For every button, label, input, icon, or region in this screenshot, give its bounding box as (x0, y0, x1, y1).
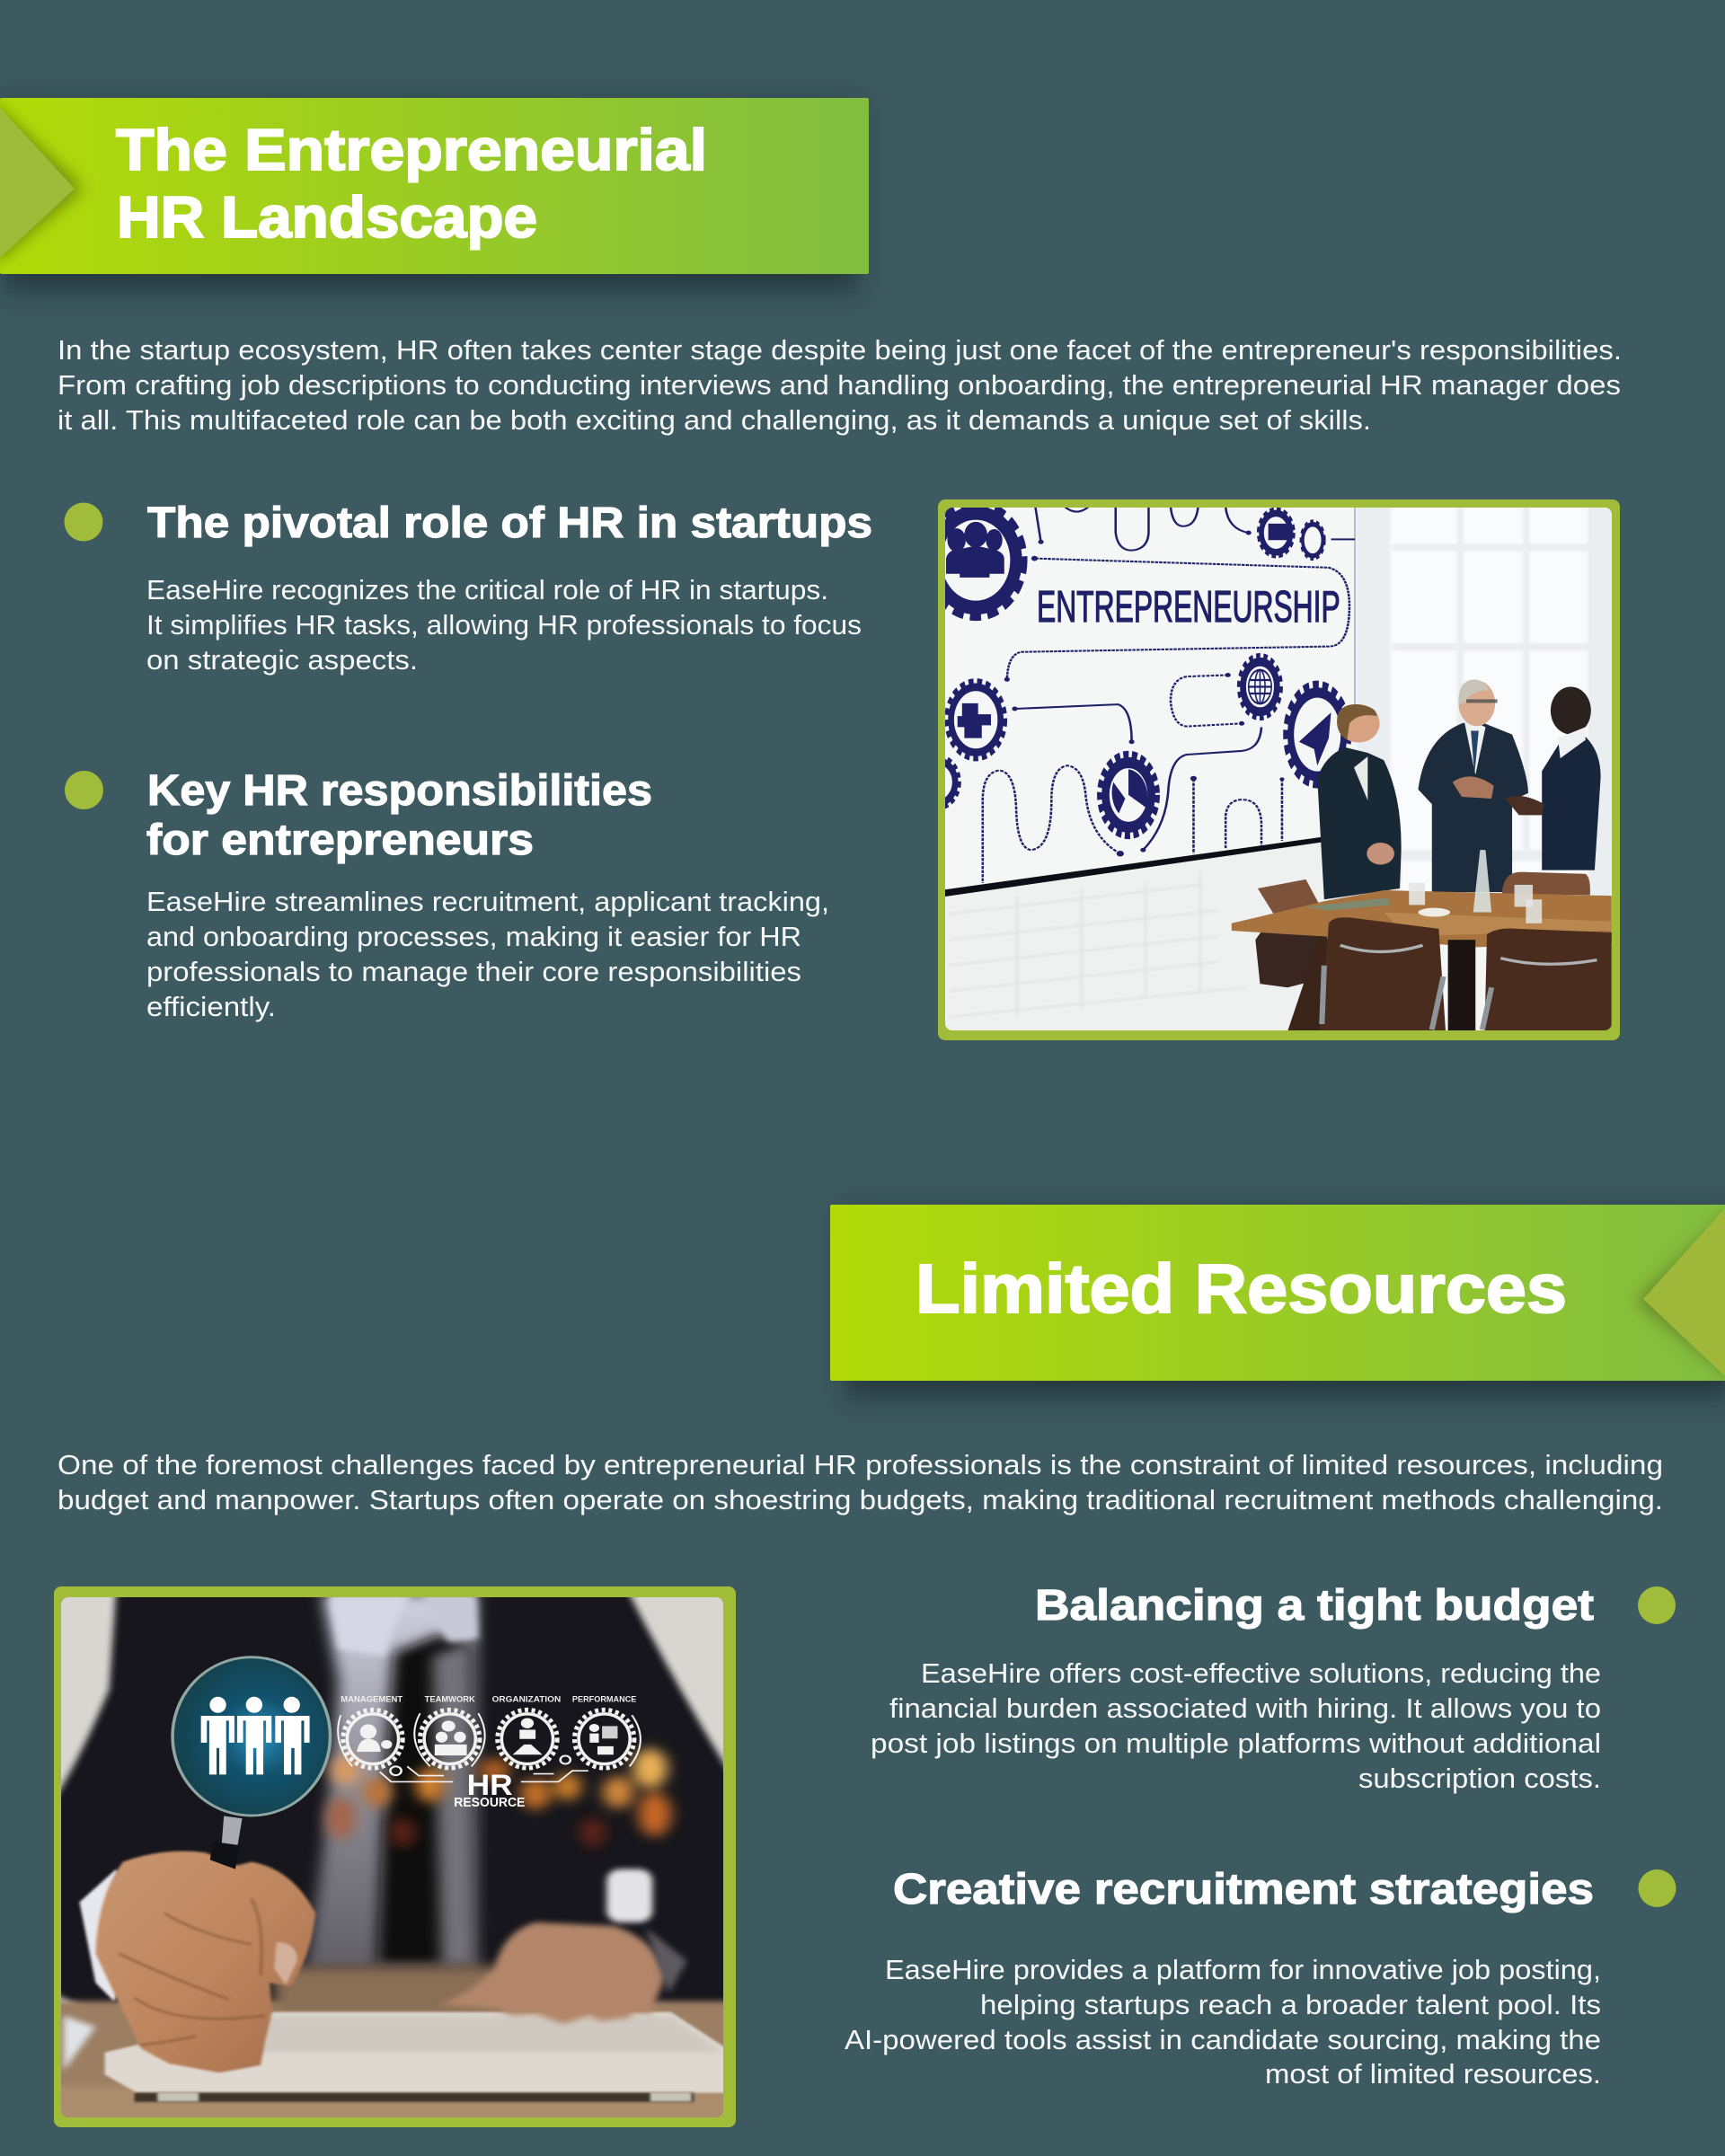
text block: intro one: it all. This multifaceted role can be both exciting and challenging, as it demands a unique set of skills. (58, 404, 1371, 436)
panel: balancing a tight budget (871, 1582, 1676, 1794)
text block: intro one: In the startup ecosystem, HR often takes center stage despite being just one facet of the entrepreneur's responsibilities. (58, 334, 1622, 366)
magnifier handle (222, 1816, 243, 1845)
lens (172, 1657, 331, 1816)
icon: bullet (1639, 1869, 1676, 1907)
text block: creative body (845, 1954, 1601, 2090)
labels in image: MANAGEMENT (341, 1695, 403, 1704)
labels in image: HR (467, 1769, 513, 1801)
heading: pivotal role: The pivotal role of HR in startups (147, 499, 872, 547)
text on wall: ENTREPRENEURSHIP (1037, 582, 1340, 631)
panel: pivotal role of HR (65, 499, 872, 676)
text block: pivotal role body: on strategic aspects. (146, 644, 418, 676)
icon: bullet (65, 503, 102, 541)
text block: creative body: EaseHire provides a platform for innovative job posting, (885, 1954, 1601, 1985)
text block: pivotal role body: It simplifies HR tasks, allowing HR professionals to focus (146, 609, 862, 641)
text block: creative body: helping startups reach a broader talent pool. Its (980, 1989, 1601, 2020)
people (1317, 679, 1601, 899)
labels in image (341, 1695, 637, 1810)
labels in image: TEAMWORK (425, 1695, 475, 1704)
text block: intro one: From crafting job descriptions to conducting interviews and handling onboarding, the entrepreneurial HR manager does (58, 369, 1621, 401)
photo: HR magnifier (54, 1586, 736, 2127)
text block: creative body: most of limited resources. (1265, 2058, 1601, 2090)
left hand (95, 1851, 315, 2072)
text block: key responsibilities body: and onboarding processes, making it easier for HR (146, 921, 801, 952)
table and chairs (1258, 879, 1320, 915)
text block: intro two (58, 1449, 1663, 1515)
panel: key HR responsibilities (65, 767, 829, 1022)
icon: HR gears (338, 1710, 641, 1781)
left arm (77, 1869, 119, 2001)
heading: key responsibilities (146, 767, 652, 864)
text block: budget body: post job listings on multiple platforms without additional (871, 1727, 1601, 1759)
heading: creative recruitment: Creative recruitment strategies (893, 1866, 1594, 1913)
table (54, 2001, 733, 2122)
gears and lines (915, 504, 1355, 883)
heading: key responsibilities: for entrepreneurs (146, 817, 534, 864)
icon: people in lens (201, 1697, 310, 1774)
text block: budget body: financial burden associated with hiring. It allows you to (889, 1692, 1601, 1724)
text block: budget body: subscription costs. (1358, 1763, 1601, 1794)
icon: bullet (1638, 1586, 1676, 1624)
text block: pivotal role body (146, 574, 862, 676)
panel: creative recruitment strategies (845, 1866, 1676, 2090)
text block: key responsibilities body: EaseHire streamlines recruitment, applicant tracking, (146, 886, 829, 917)
text block: intro two: budget and manpower. Startups often operate on shoestring budgets, making traditional recruitment methods challenging. (58, 1484, 1663, 1515)
photo: entrepreneurship meeting (915, 499, 1620, 1040)
text block: budget body: EaseHire offers cost-effective solutions, reducing the (921, 1657, 1601, 1689)
keyboard (105, 2012, 733, 2093)
banner: The Entrepreneurial HR Landscape (0, 98, 869, 291)
heading: key responsibilities: Key HR responsibilities (147, 767, 652, 815)
text block: intro two: One of the foremost challenges faced by entrepreneurial HR professionals is the constraint of limited resources, including (58, 1449, 1663, 1480)
heading: section one title: The Entrepreneurial (116, 117, 707, 182)
labels in image: ORGANIZATION (492, 1695, 561, 1704)
shirt (306, 1594, 476, 1968)
lower wall (945, 862, 1402, 1030)
labels in image: PERFORMANCE (572, 1695, 637, 1704)
text block: key responsibilities body: professionals to manage their core responsibilities (146, 956, 801, 987)
heading: section one title (116, 117, 707, 250)
labels in image: RESOURCE (454, 1795, 525, 1810)
text block: key responsibilities body (146, 886, 829, 1022)
right hand (439, 1922, 667, 2024)
suit (54, 1590, 733, 2027)
text block: budget body (871, 1657, 1601, 1794)
icon: banner arrow (0, 108, 75, 258)
text block: intro one (58, 334, 1622, 436)
board rail (945, 836, 1326, 897)
heading: balancing budget: Balancing a tight budget (1035, 1582, 1594, 1630)
text block: creative body: AI-powered tools assist in candidate sourcing, making the (845, 2024, 1601, 2055)
bokeh (326, 1748, 671, 1847)
text block: key responsibilities body: efficiently. (146, 991, 276, 1022)
text block: pivotal role body: EaseHire recognizes the critical role of HR in startups. (146, 574, 828, 605)
window (1606, 508, 1612, 514)
heading: section one title: HR Landscape (117, 184, 537, 250)
banner: Limited Resources (830, 1205, 1725, 1398)
icon: bullet (65, 771, 103, 809)
icon: banner arrow (1643, 1208, 1725, 1376)
heading: Limited Resources: Limited Resources (916, 1250, 1567, 1328)
